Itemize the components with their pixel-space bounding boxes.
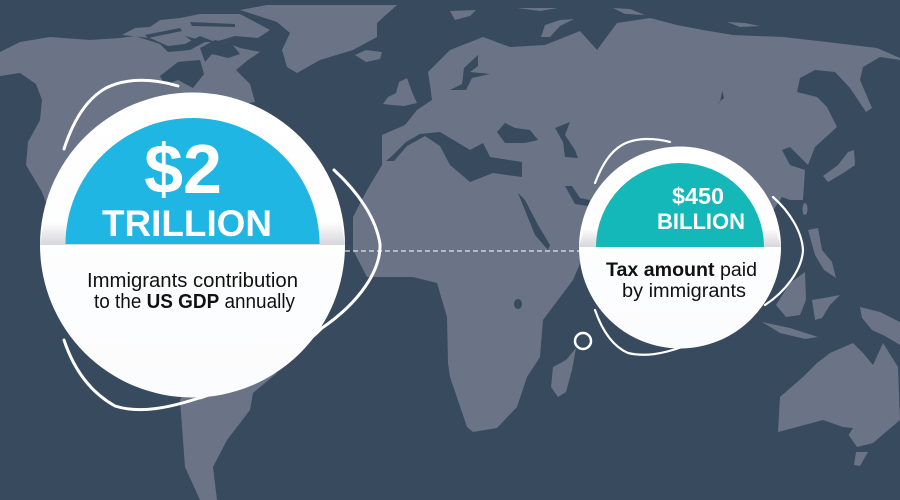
Ireland and Great Britain: [383, 78, 417, 106]
white disc: [579, 146, 781, 348]
Novaya Zemlya: [541, 19, 574, 37]
outer white arcs: [64, 80, 380, 410]
small callout: $450 billion: [579, 139, 803, 355]
Java: [762, 322, 818, 339]
Persian Gulf: [565, 186, 590, 206]
big callout: $2 trillion: [40, 80, 380, 410]
blue half circle: [66, 118, 320, 244]
Afro-Eurasia: [353, 18, 900, 432]
South America: [180, 360, 277, 500]
Arctic islands: [122, 14, 270, 46]
Japan: [823, 150, 855, 182]
Tasmania: [854, 452, 868, 466]
unit: BILLION: [657, 209, 745, 234]
Iceland: [355, 50, 382, 62]
Borneo and Sulawesi: [776, 272, 840, 320]
Philippines: [808, 228, 836, 278]
amount: $450: [672, 183, 724, 209]
description line 2: by immigrants: [622, 281, 746, 302]
Arctic Russian islands: [450, 8, 760, 27]
Caspian Sea: [555, 122, 578, 158]
Black Sea: [497, 123, 538, 143]
headline amount: $2: [144, 130, 222, 208]
Taiwan: [802, 203, 808, 215]
dashed connector line: [345, 250, 580, 252]
small ring marker: [575, 333, 591, 349]
description line 1: Immigrants contribution: [87, 270, 298, 292]
Great Bight gulf: [843, 427, 853, 436]
headline unit: TRILLION: [102, 203, 272, 244]
seas over the land: [145, 22, 853, 436]
white disc: [40, 92, 345, 398]
outer white arcs: [595, 139, 803, 355]
North America: [0, 36, 260, 230]
disc shading: [579, 228, 781, 247]
Lake Victoria: [514, 299, 522, 309]
Mediterranean Sea: [386, 132, 522, 182]
disc shading: [40, 222, 345, 245]
Red Sea: [518, 193, 550, 250]
Baltic Sea: [450, 55, 490, 90]
Baffin gulf: [200, 40, 240, 62]
description line 2: to the US GDP annually: [94, 291, 295, 313]
New Guinea: [860, 307, 900, 345]
teal half circle: [596, 163, 764, 247]
Lake Baikal: [717, 90, 724, 104]
Australia: [778, 343, 900, 447]
description line 1: Tax amount paid: [606, 260, 757, 281]
Arctic channels: [145, 22, 235, 44]
Greenland: [240, 5, 397, 73]
Hudson Bay: [160, 60, 204, 88]
Madagascar: [551, 348, 576, 397]
